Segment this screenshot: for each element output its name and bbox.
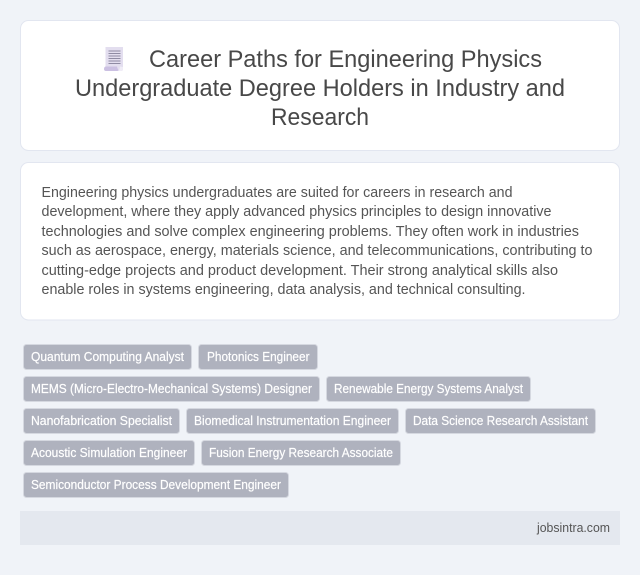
- tag: Data Science Research Assistant: [406, 408, 596, 434]
- tag: MEMS Designer: [24, 376, 320, 402]
- tag: Quantum Computing Analyst: [24, 344, 192, 370]
- tag: Renewable Energy Systems Analyst: Renewable Energy Systems Analyst: [334, 382, 523, 396]
- tag: Semiconductor Process Development Engineer: Semiconductor Process Development Engineer: [31, 478, 281, 492]
- text block: description: cutting-edge projects and product development. Their strong analytical skills also: [42, 263, 558, 279]
- tag: Nanofabrication Specialist: Nanofabrication Specialist: [31, 414, 173, 428]
- tag: MEMS Designer: MEMS (Micro-Electro-Mechanical Systems) Designer: [31, 382, 312, 396]
- text block: description: Engineering physics undergraduates are suited for careers in research and: [42, 185, 512, 201]
- text block: description: [42, 185, 592, 298]
- tag: Quantum Computing Analyst: Quantum Computing Analyst: [31, 350, 184, 364]
- title: Undergraduate Degree Holders in Industry and: [75, 75, 565, 102]
- title: Research: [271, 104, 369, 131]
- title: Career Paths for Engineering Physics: [149, 46, 542, 73]
- text block: description: enable roles in systems engineering, data analysis, and technical consulting.: [42, 282, 526, 298]
- tag: Photonics Engineer: [198, 344, 318, 370]
- title: [75, 46, 565, 131]
- tag: Biomedical Instrumentation Engineer: Biomedical Instrumentation Engineer: [194, 414, 391, 428]
- text block: description: such as aerospace, energy, materials science, and telecommunications, contributing to: [42, 243, 592, 259]
- panel: title card: [20, 20, 620, 150]
- text block: description: technologies and solve complex engineering problems. They often work in industries: [42, 224, 579, 240]
- tag: Data Science Research Assistant: Data Science Research Assistant: [413, 414, 588, 428]
- icon: paper scroll: [104, 47, 123, 71]
- tag: Semiconductor Process Development Engineer: [24, 472, 288, 498]
- panel: description card: [20, 162, 620, 320]
- tag: Fusion Energy Research Associate: [202, 440, 400, 466]
- footer: [20, 511, 620, 545]
- tag: Fusion Energy Research Associate: Fusion Energy Research Associate: [209, 446, 393, 460]
- tag: Nanofabrication Specialist: [24, 408, 180, 434]
- tag: Photonics Engineer: Photonics Engineer: [207, 350, 310, 364]
- text block: description: development, where they apply advanced physics principles to design innovative: [42, 204, 552, 220]
- tag: Acoustic Simulation Engineer: Acoustic Simulation Engineer: [31, 446, 187, 460]
- footer: jobsintra.com: [536, 521, 610, 535]
- tag: Acoustic Simulation Engineer: [24, 440, 194, 466]
- tag: Biomedical Instrumentation Engineer: [186, 408, 398, 434]
- tag: Renewable Energy Systems Analyst: [326, 376, 530, 402]
- tag list: career paths: [24, 344, 596, 498]
